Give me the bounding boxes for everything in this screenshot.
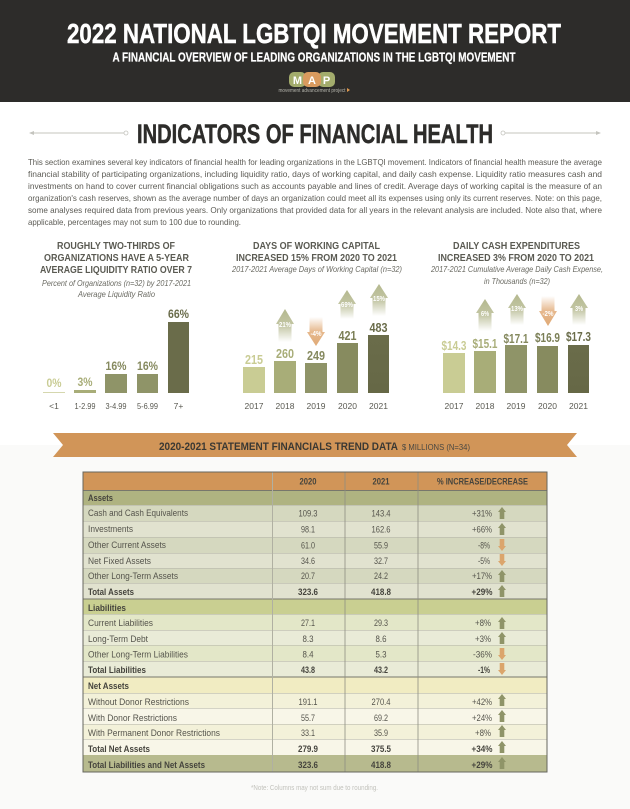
row: net fixed assets: -5% [478, 556, 490, 566]
arrow: up 69%: 69% [341, 300, 353, 309]
bar chart: 2018 [476, 401, 495, 411]
row: with permanent donor restrictions [83, 724, 547, 739]
row: without donor restrictions: Without Donor Restrictions [88, 697, 189, 707]
table header row: 2020 [300, 476, 316, 486]
row: current liabilities: 27.1 [301, 618, 315, 628]
row: other long-term liabilities: Other Long-Term Liabilities [88, 650, 188, 660]
arrow: up 3% [570, 294, 588, 325]
row: total liabilities and net assets: +29% [472, 760, 492, 770]
MAP logo: movement advancement project [278, 88, 346, 94]
row: cash and cash equivalents [83, 505, 547, 521]
row: other long-term assets: 24.2 [374, 571, 388, 581]
chart subtitle: Percent of Organizations (n=32) by 2017-2021 [42, 278, 191, 288]
arrow: up 69% [338, 290, 356, 319]
row: net fixed assets [83, 553, 547, 568]
row: with permanent donor restrictions: +8% [475, 728, 491, 738]
arrow: up 6% [476, 299, 494, 331]
arrow: down 2%: -2% [542, 309, 554, 318]
bar chart: 2021 [569, 401, 588, 411]
row: current liabilities [83, 614, 547, 630]
lower section background [0, 445, 630, 809]
chart subtitle: Average Liquidity Ratio [77, 289, 155, 299]
table footnote: *Note: Columns may not sum due to rounding. [251, 785, 378, 792]
row: other long-term liabilities: -36% [473, 650, 492, 660]
chart subtitle: 2017-2021 Average Days of Working Capital (n=32) [231, 264, 402, 274]
bar chart: 2019 [507, 401, 526, 411]
row: total assets [83, 583, 547, 599]
row: long-term debt [83, 630, 547, 645]
row: current liabilities: +8% [475, 618, 491, 628]
chart heading: INCREASED 3% FROM 2020 TO 2021 [438, 252, 594, 264]
row: other long-term liabilities [83, 645, 547, 661]
row: total net assets: +34% [472, 744, 492, 754]
banner: statement financials heading [53, 433, 577, 457]
row: with donor restrictions: +24% [472, 713, 492, 723]
arrow: down 4%: -4% [310, 329, 322, 338]
arrow: up 3%: 3% [575, 304, 583, 313]
intro paragraph: some analyses required data from previous years. Only organizations that provided data for all years in the relevant analysis are included. Note also that, where [28, 205, 602, 215]
report subtitle: A FINANCIAL OVERVIEW OF LEADING ORGANIZATIONS IN THE LGBTQI MOVEMENT [112, 50, 516, 64]
banner: statement financials heading: $ MILLIONS (N=34) [402, 443, 470, 452]
bar chart: 5-6.99 [137, 401, 158, 411]
arrow: up 15%: 15% [373, 294, 385, 303]
row: cash and cash equivalents: 143.4 [372, 508, 390, 518]
row: without donor restrictions: +42% [472, 697, 492, 707]
row: total liabilities: -1% [478, 665, 490, 675]
row: without donor restrictions: 191.1 [298, 697, 318, 707]
row: current liabilities: Current Liabilities [88, 618, 153, 628]
bar chart [442, 329, 591, 411]
bar chart [243, 320, 389, 411]
row: total liabilities and net assets: 418.8 [371, 760, 391, 770]
bar chart: $17.3 [566, 329, 591, 344]
row: other current assets [83, 537, 547, 553]
bar chart: 2020 [538, 401, 557, 411]
bar chart: 0% [46, 376, 62, 390]
bar chart: $15.1 [472, 336, 498, 351]
chart subtitle: 2017-2021 Cumulative Average Daily Cash Expense, [430, 264, 603, 274]
MAP logo: A [308, 75, 316, 87]
row: with donor restrictions: 55.7 [301, 713, 315, 723]
row: other long-term assets [83, 568, 547, 583]
row: total assets: +29% [472, 587, 492, 597]
row: with donor restrictions: With Donor Restrictions [88, 713, 177, 723]
table: statement financials [83, 472, 547, 772]
chart heading: DAILY CASH EXPENDITURES [453, 240, 580, 252]
intro paragraph: financial stability of participating organizations, including liquidity ratio, days of working capital, and daily cash expense. Liquidity ratio measures cash and [28, 169, 602, 179]
arrow: up 13%: 13% [511, 304, 523, 313]
bar chart: 249 [307, 348, 325, 363]
row: cash and cash equivalents: Cash and Cash Equivalents [88, 508, 188, 518]
banner: statement financials heading: 2020-2021 STATEMENT FINANCIALS TREND DATA [159, 441, 398, 453]
bar chart: 2017 [245, 401, 264, 411]
arrow: up 6%: 6% [481, 309, 489, 318]
header band [0, 0, 630, 102]
chart subtitle: in Thousands (n=32) [484, 276, 550, 286]
row: current liabilities: 29.3 [374, 618, 388, 628]
row: total liabilities: 43.2 [374, 665, 388, 675]
bar chart: <1 [49, 401, 59, 411]
bar chart: 260 [276, 346, 294, 361]
section row: liabilities [83, 599, 547, 614]
table header row: 2021 [372, 476, 390, 486]
MAP logo: P [323, 75, 330, 87]
row: other current assets: -8% [478, 540, 490, 550]
section row: assets: Assets [88, 493, 113, 503]
row: long-term debt: Long-Term Debt [88, 634, 148, 644]
intro paragraph: organization's cash reserves, shown as the average number of days an organization could meet all its expenses using only its current reserves. Note: on this page, [28, 193, 602, 203]
row: other long-term liabilities: 8.4 [302, 650, 314, 660]
section row: liabilities: Liabilities [88, 603, 126, 613]
row: total net assets: 279.9 [298, 744, 318, 754]
section row: net assets [83, 677, 547, 693]
arrow: down 2% [539, 296, 557, 326]
row: with donor restrictions: 69.2 [374, 713, 388, 723]
bar chart: 3% [78, 375, 93, 389]
row: cash and cash equivalents: 109.3 [298, 508, 318, 518]
row: total liabilities and net assets: Total Liabilities and Net Assets [88, 760, 205, 770]
row: total net assets: 375.5 [371, 744, 391, 754]
bar chart: 16% [137, 359, 158, 373]
bar chart: $17.1 [504, 331, 528, 346]
row: other current assets: 55.9 [374, 540, 388, 550]
row: without donor restrictions [83, 693, 547, 708]
row: investments: +66% [472, 524, 492, 534]
row: long-term debt: 8.6 [376, 634, 386, 644]
bar chart: 3-4.99 [106, 401, 127, 411]
chart subtitle [430, 264, 603, 286]
row: total assets: 323.6 [298, 587, 318, 597]
row: cash and cash equivalents: +31% [472, 508, 492, 518]
panel: daily cash expenditures chart [430, 240, 603, 411]
row: with donor restrictions [83, 708, 547, 724]
row: total net assets: Total Net Assets [88, 744, 150, 754]
MAP logo: M [293, 75, 302, 87]
panel: liquidity ratio chart [40, 240, 192, 411]
bar chart: 2018 [276, 401, 295, 411]
row: long-term debt: 8.3 [302, 634, 314, 644]
chart heading: AVERAGE LIQUIDITY RATIO OVER 7 [40, 264, 192, 276]
section heading: indicators of financial health: INDICATORS OF FINANCIAL HEALTH [137, 119, 493, 149]
bar chart: 16% [106, 359, 127, 373]
chart heading [236, 240, 397, 264]
bar chart: $14.3 [442, 338, 466, 353]
row: other long-term assets: 20.7 [301, 571, 315, 581]
chart heading: INCREASED 15% FROM 2020 TO 2021 [236, 252, 397, 264]
bar chart: 215 [245, 352, 263, 367]
bar chart: 7+ [174, 401, 183, 411]
row: investments: Investments [88, 524, 133, 534]
row: total liabilities and net assets: 323.6 [298, 760, 318, 770]
bar chart: 421 [338, 328, 356, 343]
bar chart [43, 307, 189, 411]
row: other current assets: Other Current Assets [88, 540, 166, 550]
chart subtitle [42, 278, 191, 299]
arrow: up 15% [370, 284, 388, 316]
bar chart: 2021 [369, 401, 388, 411]
chart heading [40, 240, 192, 276]
bar chart: 2019 [307, 401, 326, 411]
bar chart: 66% [168, 307, 189, 321]
chart heading: ORGANIZATIONS HAVE A 5-YEAR [44, 252, 189, 264]
row: other long-term assets: Other Long-Term Assets [88, 571, 178, 581]
row: total liabilities: 43.8 [301, 665, 315, 675]
row: investments: 98.1 [301, 524, 315, 534]
bar chart: 2020 [338, 401, 357, 411]
arrow: down 4% [307, 317, 325, 346]
chart heading: ROUGHLY TWO-THIRDS OF [57, 240, 175, 252]
bar chart: $16.9 [535, 330, 560, 345]
arrow: up 21%: 21% [279, 320, 291, 329]
row: total net assets [83, 739, 547, 755]
chart heading: DAYS OF WORKING CAPITAL [253, 240, 380, 252]
arrow: up 13% [508, 294, 526, 325]
row: total liabilities: Total Liabilities [88, 665, 146, 675]
panel: days of working capital chart [231, 240, 402, 411]
section row: assets [83, 490, 547, 505]
row: with permanent donor restrictions: With Permanent Donor Restrictions [88, 728, 220, 738]
row: investments [83, 521, 547, 537]
row: net fixed assets: 34.6 [301, 556, 315, 566]
row: net fixed assets: 32.7 [374, 556, 388, 566]
row: without donor restrictions: 270.4 [372, 697, 390, 707]
row: net fixed assets: Net Fixed Assets [88, 556, 151, 566]
section row: net assets: Net Assets [88, 681, 129, 691]
row: other current assets: 61.0 [301, 540, 315, 550]
row: with permanent donor restrictions: 35.9 [374, 728, 388, 738]
row: with permanent donor restrictions: 33.1 [301, 728, 315, 738]
row: other long-term liabilities: 5.3 [376, 650, 386, 660]
intro paragraph [28, 157, 602, 227]
bar chart: 1-2.99 [74, 401, 96, 411]
row: investments: 162.6 [372, 524, 390, 534]
row: other long-term assets: +17% [472, 571, 492, 581]
table header row [83, 472, 547, 490]
arrow: up 21% [276, 309, 294, 342]
row: long-term debt: +3% [475, 634, 491, 644]
row: total liabilities and net assets [83, 755, 547, 772]
MAP logo [278, 72, 350, 94]
intro paragraph: investments on hand to cover current financial obligations such as accounts payable and lines of credit. Average days of working capital is the measure of an [28, 181, 602, 191]
row: total liabilities [83, 661, 547, 677]
table header row: % INCREASE/DECREASE [437, 476, 528, 486]
chart heading [438, 240, 594, 264]
bar chart: 483 [370, 320, 388, 335]
intro paragraph: applicable, percentages may not sum to 100 due to rounding. [28, 217, 241, 227]
row: total assets: Total Assets [88, 587, 134, 597]
row: total assets: 418.8 [371, 587, 391, 597]
bar chart: 2017 [445, 401, 464, 411]
